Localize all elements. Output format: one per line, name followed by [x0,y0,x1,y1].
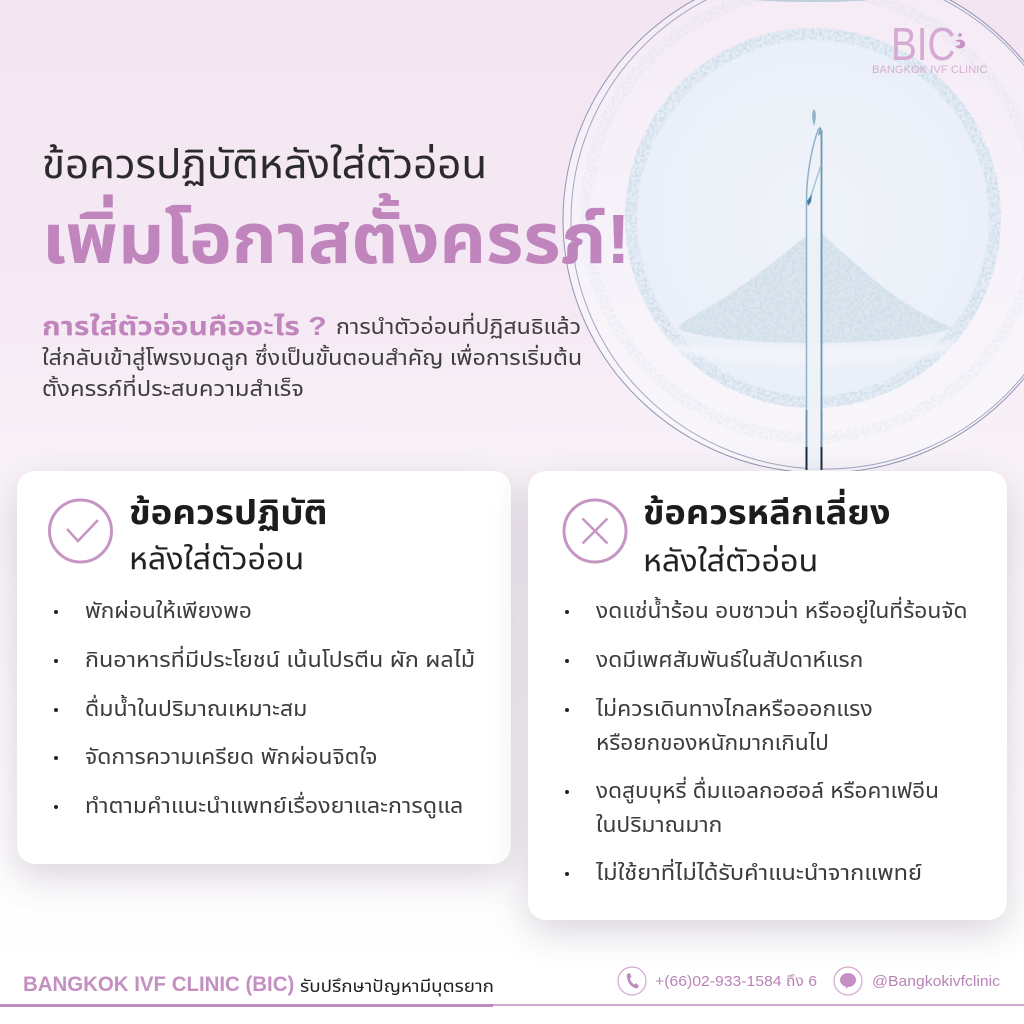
dish top mark [747,0,877,2]
footer brand: BANGKOK IVF CLINIC (BIC) [23,973,294,996]
item 3: ดื่มน้ำในปริมาณเหมาะสม [85,698,307,721]
list [565,596,968,885]
cone [660,228,965,364]
item 1: งดแช่น้ำร้อน อบซาวน่า หรืออยู่ในที่ร้อนจัด [596,600,968,623]
title: ข้อควรปฏิบัติหลังใส่ตัวอ่อน [42,143,487,187]
panel: avoid [528,471,1007,920]
heading: ข้อควรหลีกเลี่ยง [643,494,891,532]
icon: phone [617,966,647,996]
subheading: หลังใส่ตัวอ่อน [129,543,304,576]
list: ในปริมาณมาก [596,814,722,837]
intro line 2: ใส่กลับเข้าสู่โพรงมดลูก ซึ่งเป็นขั้นตอนสำคัญ เพื่อการเริ่มต้น [42,347,582,370]
logo name: BANGKOK IVF CLINIC [872,64,988,76]
intro text [42,311,582,401]
line handle: @Bangkokivfclinic [872,973,1000,990]
intro question: การใส่ตัวอ่อนคืออะไร ? [42,311,327,341]
item 1: พักผ่อนให้เพียงพอ [85,600,252,623]
outer speckled ring [586,0,1024,438]
headline: เพิ่มโอกาสตั้งครรภ์! [42,200,630,278]
panel: do [17,471,511,864]
heading: ข้อควรปฏิบัติ [129,494,328,532]
item 5: ไม่ใช้ยาที่ไม่ได้รับคำแนะนำจากแพทย์ [596,862,922,885]
item 3: ไม่ควรเดินทางไกลหรือออกแรง [596,698,873,721]
item 4: งดสูบบุหรี่ ดื่มแอลกอฮอล์ หรือคาเฟอีน [596,780,939,803]
item 2: กินอาหารที่มีประโยชน์ เน้นโปรตีน ผัก ผลไม้ [85,649,475,672]
logo icon [955,33,965,48]
logo [872,18,988,76]
embryo disc [625,28,1001,408]
intro line 1: การนำตัวอ่อนที่ปฏิสนธิแล้ว [336,316,581,339]
footer [0,966,1024,1007]
footer tagline: รับปรึกษาปัญหามีบุตรยาก [300,977,494,996]
intro line 3: ตั้งครรภ์ที่ประสบความสำเร็จ [42,378,304,401]
icon: check [48,498,113,564]
list: หรือยกของหนักมากเกินไป [596,732,829,755]
phone number: +(66)02-933-1584 ถึง 6 [655,973,817,990]
logo mark: BIC [891,18,955,70]
petri dish [563,0,1024,473]
subheading: หลังใส่ตัวอ่อน [643,545,818,578]
icon: line [833,966,863,996]
footer line [0,1004,1024,1006]
item 5: ทำตามคำแนะนำแพทย์เรื่องยาและการดูแล [85,795,463,818]
list [54,600,475,818]
item 2: งดมีเพศสัมพันธ์ในสัปดาห์แรก [596,649,863,672]
icon: cross [562,498,628,564]
pipette [806,109,823,470]
item 4: จัดการความเครียด พักผ่อนจิตใจ [85,746,378,769]
